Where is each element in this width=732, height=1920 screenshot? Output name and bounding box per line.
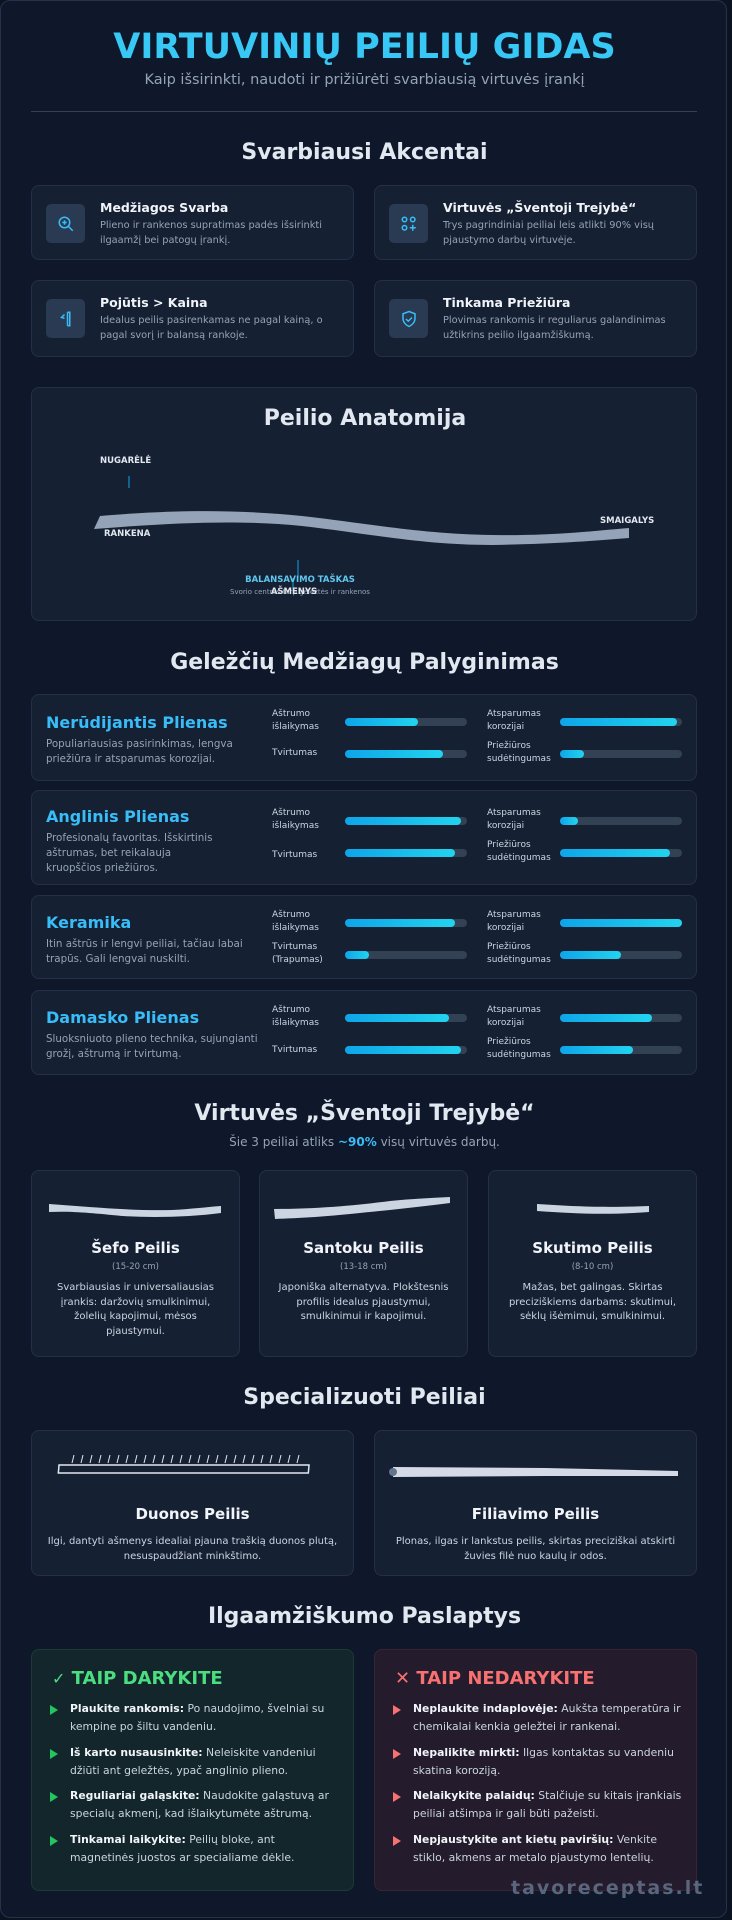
card: santoku: Santoku Peilis [303,1239,424,1257]
material: stainless: Populiariausias pasirinkimas, lengva priežiūra ir atsparumas korozijai. [46,738,233,765]
heading: anatomy: Peilio Anatomija [264,406,466,431]
card: bread knife [31,1430,354,1576]
heading: specialized: Specializuoti Peiliai [243,1385,486,1410]
card: santoku: (13-18 cm) [340,1262,387,1272]
heading: don't: ✕ TAIP NEDARYKITE [395,1668,595,1689]
material: stainless [31,694,697,781]
subtitle: Kaip išsirinkti, naudoti ir prižiūrėti svarbiausią virtuvės įrankį [144,72,585,88]
watermark: tavoreceptas.lt [511,1877,704,1899]
material: damascus: Sluoksniuoto plieno technika, sujungianti grožį, aštrumą ir tvirtumą. [46,1033,258,1060]
heading: trinity: Virtuvės „Šventoji Trejybė“ [194,1101,535,1126]
material: carbon: Priežiūros [487,840,531,850]
material: damascus: sudėtingumas [487,1050,551,1060]
heading: materials: Geležčių Medžiagų Palyginimas [170,650,559,675]
icon: shield [389,299,428,338]
card: fillet knife: Plonas, ilgas ir lankstus peilis, skirtas preciziškai atskirti žuvies filė nuo kaulų ir odos. [396,1536,675,1562]
material: damascus: Tvirtumas [272,1045,317,1055]
heading: do: ✓ TAIP DARYKITE [52,1668,223,1689]
heading: longevity: Ilgaamžiškumo Paslaptys [208,1604,521,1629]
icon: magnifier [46,204,85,243]
card: trinity: Virtuvės „Šventoji Trejybė“ [443,200,636,215]
icon: hand [46,299,85,338]
material: ceramic [31,895,697,979]
heading: highlights: Svarbiausi Akcentai [241,140,488,165]
material: carbon: Aštrumo [272,808,310,818]
panel: do: Iš karto nusausinkite: Neleiskite vandeniui džiūti ant geležtės, ypač anglinio plieno. [70,1746,316,1776]
card: chef knife: Šefo Peilis [91,1239,180,1257]
panel: anatomy [31,387,697,621]
card: trinity [374,185,697,260]
card: paring: Skutimo Peilis [532,1239,653,1257]
material: ceramic: korozijai [487,923,524,933]
panel: don't: Neplaukite indaplovėje: Aukšta temperatūra ir chemikalai kenkia geležtei ir rankenai. [413,1702,681,1732]
material: stainless: Nerūdijantis Plienas [46,713,228,732]
material: stainless: Atsparumas [487,709,541,719]
knife diagram: RANKENA [104,529,151,539]
material: ceramic: Keramika [46,913,131,932]
icon: grid [389,204,428,243]
knife diagram: BALANSAVIMO TAŠKAS [245,573,355,585]
card: care: Tinkama Priežiūra [443,295,570,310]
knife diagram: AŠMENYS [271,585,317,597]
card: paring [488,1170,697,1357]
subtitle: trinity: Šie 3 peiliai atliks ~90% visų virtuvės darbų. [229,1135,500,1149]
knife diagram [94,454,654,597]
panel: do: Tinkamai laikykite: Peilių bloke, ant magnetinės juostos ar specialiame dėkle. [70,1833,294,1864]
material: stainless: Tvirtumas [272,748,317,758]
material: damascus: Priežiūros [487,1037,531,1047]
material: stainless: Aštrumo [272,709,310,719]
material: stainless: Priežiūros [487,741,531,751]
material: damascus [31,990,697,1075]
knife diagram: SMAIGALYS [600,516,654,526]
card: fillet knife [374,1430,697,1576]
material: ceramic: Itin aštrūs ir lengvi peiliai, tačiau labai trapūs. Gali lengvai nuskilti. [46,938,243,965]
card: trinity: Trys pagrindiniai peiliai leis atlikti 90% visų pjaustymo darbų virtuvėje. [443,220,654,246]
material: carbon: sudėtingumas [487,853,551,863]
material: carbon: korozijai [487,821,524,831]
material: damascus: Atsparumas [487,1005,541,1015]
card: santoku: Japoniška alternatyva. Plokštesnis profilis idealus pjaustymui, smulkinimui ir kapojimui. [279,1282,448,1322]
material: ceramic: Aštrumo [272,910,310,920]
material: carbon: Atsparumas [487,808,541,818]
card: feel [31,280,354,357]
card: paring: Mažas, bet galingas. Skirtas preciziškiems darbams: skutimui, sėklų išėmimui, smulkinimui. [509,1282,676,1322]
material: carbon: išlaikymas [272,821,319,831]
material: damascus: Damasko Plienas [46,1008,199,1027]
material: carbon: Tvirtumas [272,850,317,860]
panel: do [31,1649,354,1891]
material: damascus: Aštrumo [272,1005,310,1015]
card: feel: Pojūtis > Kaina [100,295,208,310]
material: carbon: Profesionalų favoritas. Išskirtinis aštrumas, bet reikalauja kruopščios priežiūros. [46,832,212,874]
material: damascus: korozijai [487,1018,524,1028]
card: bread knife: Duonos Peilis [135,1505,250,1523]
material: carbon: Anglinis Plienas [46,807,189,826]
panel: don't [374,1649,697,1891]
card: material [31,185,354,260]
material: ceramic: Tvirtumas [272,942,317,952]
material: ceramic: Atsparumas [487,910,541,920]
card: chef knife [31,1170,240,1357]
panel: do: Reguliariai galąskite: Naudokite galąstuvą ar specialų akmenį, kad išlaikytumėte aštrumą. [70,1789,329,1820]
knife diagram: NUGARĖLĖ [100,455,151,466]
card: chef knife: Svarbiausias ir universaliausias įrankis: daržovių smulkinimui, žolelių kapojimui, mėsos pjaustymui. [57,1282,214,1336]
card: care [374,280,697,357]
card: chef knife: (15-20 cm) [112,1262,159,1272]
material: damascus: išlaikymas [272,1018,319,1028]
panel: don't: Nepalikite mirkti: Ilgas kontaktas su vandeniu skatina koroziją. [413,1746,674,1776]
panel: do: Plaukite rankomis: Po naudojimo, švelniai su kempine po šiltu vandeniu. [70,1702,324,1732]
card: paring: (8-10 cm) [572,1262,613,1272]
material: stainless: korozijai [487,722,524,732]
card: fillet knife: Filiavimo Peilis [472,1505,599,1523]
knife diagram: Svorio centras tarp geležtės ir rankenos [230,588,370,596]
panel: don't: Nepjaustykite ant kietų paviršių: Venkite stiklo, akmens ar metalo pjaustymo lentelių. [413,1833,657,1864]
material: carbon [31,790,697,885]
material: ceramic: Priežiūros [487,942,531,952]
material: ceramic: (Trapumas) [272,955,323,965]
material: stainless: sudėtingumas [487,754,551,764]
card: material: Plieno ir rankenos supratimas padės išsirinkti ilgaamžį bei patogų įrankį. [100,220,322,246]
panel: don't: Nelaikykite palaidų: Stalčiuje su kitais įrankiais peiliai atšimpa ir gali būti pažeisti. [413,1789,681,1820]
material: ceramic: sudėtingumas [487,955,551,965]
card: santoku [259,1170,468,1357]
card: care: Plovimas rankomis ir reguliarus galandinimas užtikrins peilio ilgaamžiškumą. [443,315,666,341]
card: material: Medžiagos Svarba [100,200,228,215]
material: ceramic: išlaikymas [272,923,319,933]
title: VIRTUVINIŲ PEILIŲ GIDAS [113,27,616,67]
card: feel: Idealus peilis pasirenkamas ne pagal kainą, o pagal svorį ir balansą rankoje. [100,315,323,341]
material: stainless: išlaikymas [272,722,319,732]
card: bread knife: Ilgi, dantyti ašmenys idealiai pjauna traškią duonos plutą, nesuspaudžiant minkštimo. [48,1536,337,1562]
